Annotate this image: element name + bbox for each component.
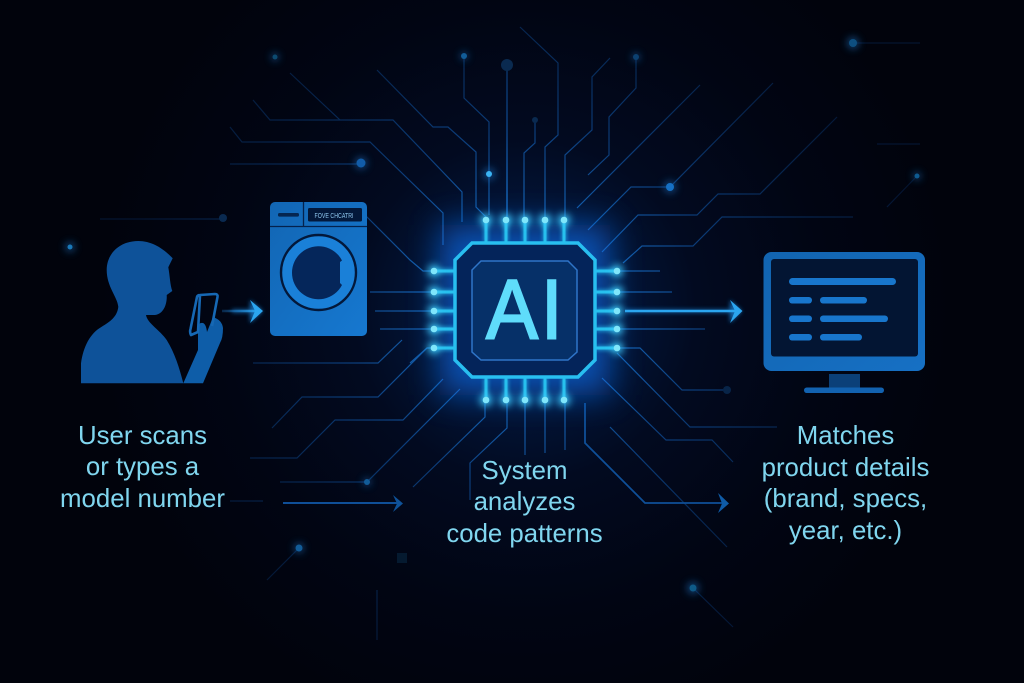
icon: hand	[183, 317, 223, 383]
chip label: AI	[486, 264, 563, 357]
caption: user scans	[60, 422, 225, 513]
caption: matches product details: product details	[762, 454, 929, 482]
caption: matches product details: (brand, specs,	[764, 485, 927, 513]
monitor text lines	[789, 278, 896, 340]
caption: user scans: User scans	[78, 422, 207, 450]
caption: matches product details: year, etc.)	[789, 517, 902, 545]
caption: user scans: model number	[60, 485, 225, 513]
dim arrow left lower	[283, 495, 403, 512]
icon: washing machine	[270, 202, 367, 336]
caption: matches product details	[762, 422, 929, 545]
caption: system analyzes: analyzes	[474, 488, 575, 516]
arrow: person to washer	[222, 300, 263, 323]
caption: system analyzes: code patterns	[446, 520, 603, 548]
arrow: chip to monitor	[625, 300, 742, 323]
icon: monitor	[764, 252, 925, 393]
AI chip	[428, 214, 623, 406]
caption: system analyzes: System	[481, 456, 568, 484]
caption: system analyzes	[446, 456, 603, 548]
icon: person with phone	[81, 241, 223, 383]
caption: matches product details: Matches	[797, 422, 894, 450]
caption: user scans: or types a	[86, 453, 199, 481]
icon: phone outline	[190, 294, 218, 335]
dim arrow right lower	[585, 403, 729, 513]
chip pins	[428, 214, 623, 406]
washer label: FOVE CHCATRI	[314, 213, 354, 220]
network nodes	[65, 37, 921, 594]
circuit traces background	[100, 27, 920, 640]
